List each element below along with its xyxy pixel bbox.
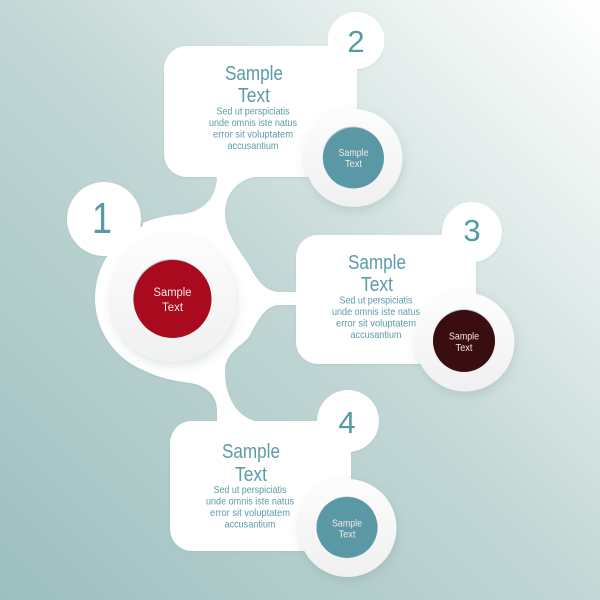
disc 3 — [416, 292, 514, 392]
main disc 1 — [110, 236, 236, 362]
card 2 text: error sit voluptatem — [213, 130, 293, 140]
disc 4 — [298, 479, 396, 577]
central white blob with links — [95, 176, 300, 422]
card 4 text — [206, 441, 294, 530]
badge 3 — [442, 202, 502, 262]
card 4 text: error sit voluptatem — [210, 508, 290, 519]
card 4 text: unde omnis iste natus — [206, 496, 294, 508]
disc 4: Sample — [332, 518, 362, 530]
main disc 1: Sample — [154, 287, 192, 299]
disc 3: Text — [456, 342, 473, 354]
card 2 — [164, 46, 357, 177]
metaball connector network — [67, 12, 502, 551]
card 4 text: accusantium — [224, 520, 276, 530]
card 3 text: Text — [361, 274, 393, 296]
card 2 text: Sed ut perspiciatis — [216, 106, 290, 118]
card 3 text: Sample — [348, 252, 406, 274]
disc 3: Sample — [449, 330, 479, 342]
main disc 1: Text — [162, 302, 184, 314]
numeral 1: 1 — [92, 194, 112, 243]
disc 2 — [304, 109, 402, 207]
card 3 text: error sit voluptatem — [336, 318, 416, 330]
card 3 text: unde omnis iste natus — [332, 307, 420, 318]
badge 2 — [328, 12, 384, 69]
card 2 text — [209, 63, 297, 152]
card 2 text: unde omnis iste natus — [209, 118, 297, 129]
badge 4 — [317, 390, 379, 452]
card 2 text: Sample — [225, 63, 283, 85]
card 4 text: Text — [235, 464, 267, 486]
card 3 text: Sed ut perspiciatis — [340, 296, 412, 306]
disc 4: Text — [338, 528, 356, 540]
card 4 text: Sed ut perspiciatis — [214, 485, 286, 496]
disc 2: Text — [345, 158, 362, 170]
card 3 text: accusantium — [350, 330, 402, 341]
numeral 3: 3 — [463, 213, 481, 248]
disc 2: Sample — [338, 147, 369, 159]
numeral 4: 4 — [338, 405, 356, 440]
card 3 text — [332, 252, 420, 341]
badge 1 — [67, 182, 141, 256]
numeral 2: 2 — [347, 24, 365, 59]
card 2 text: Text — [238, 85, 270, 107]
card 4 — [170, 421, 351, 551]
card 3 — [296, 235, 476, 364]
card 4 text: Sample — [222, 441, 280, 463]
card 2 text: accusantium — [228, 141, 278, 152]
